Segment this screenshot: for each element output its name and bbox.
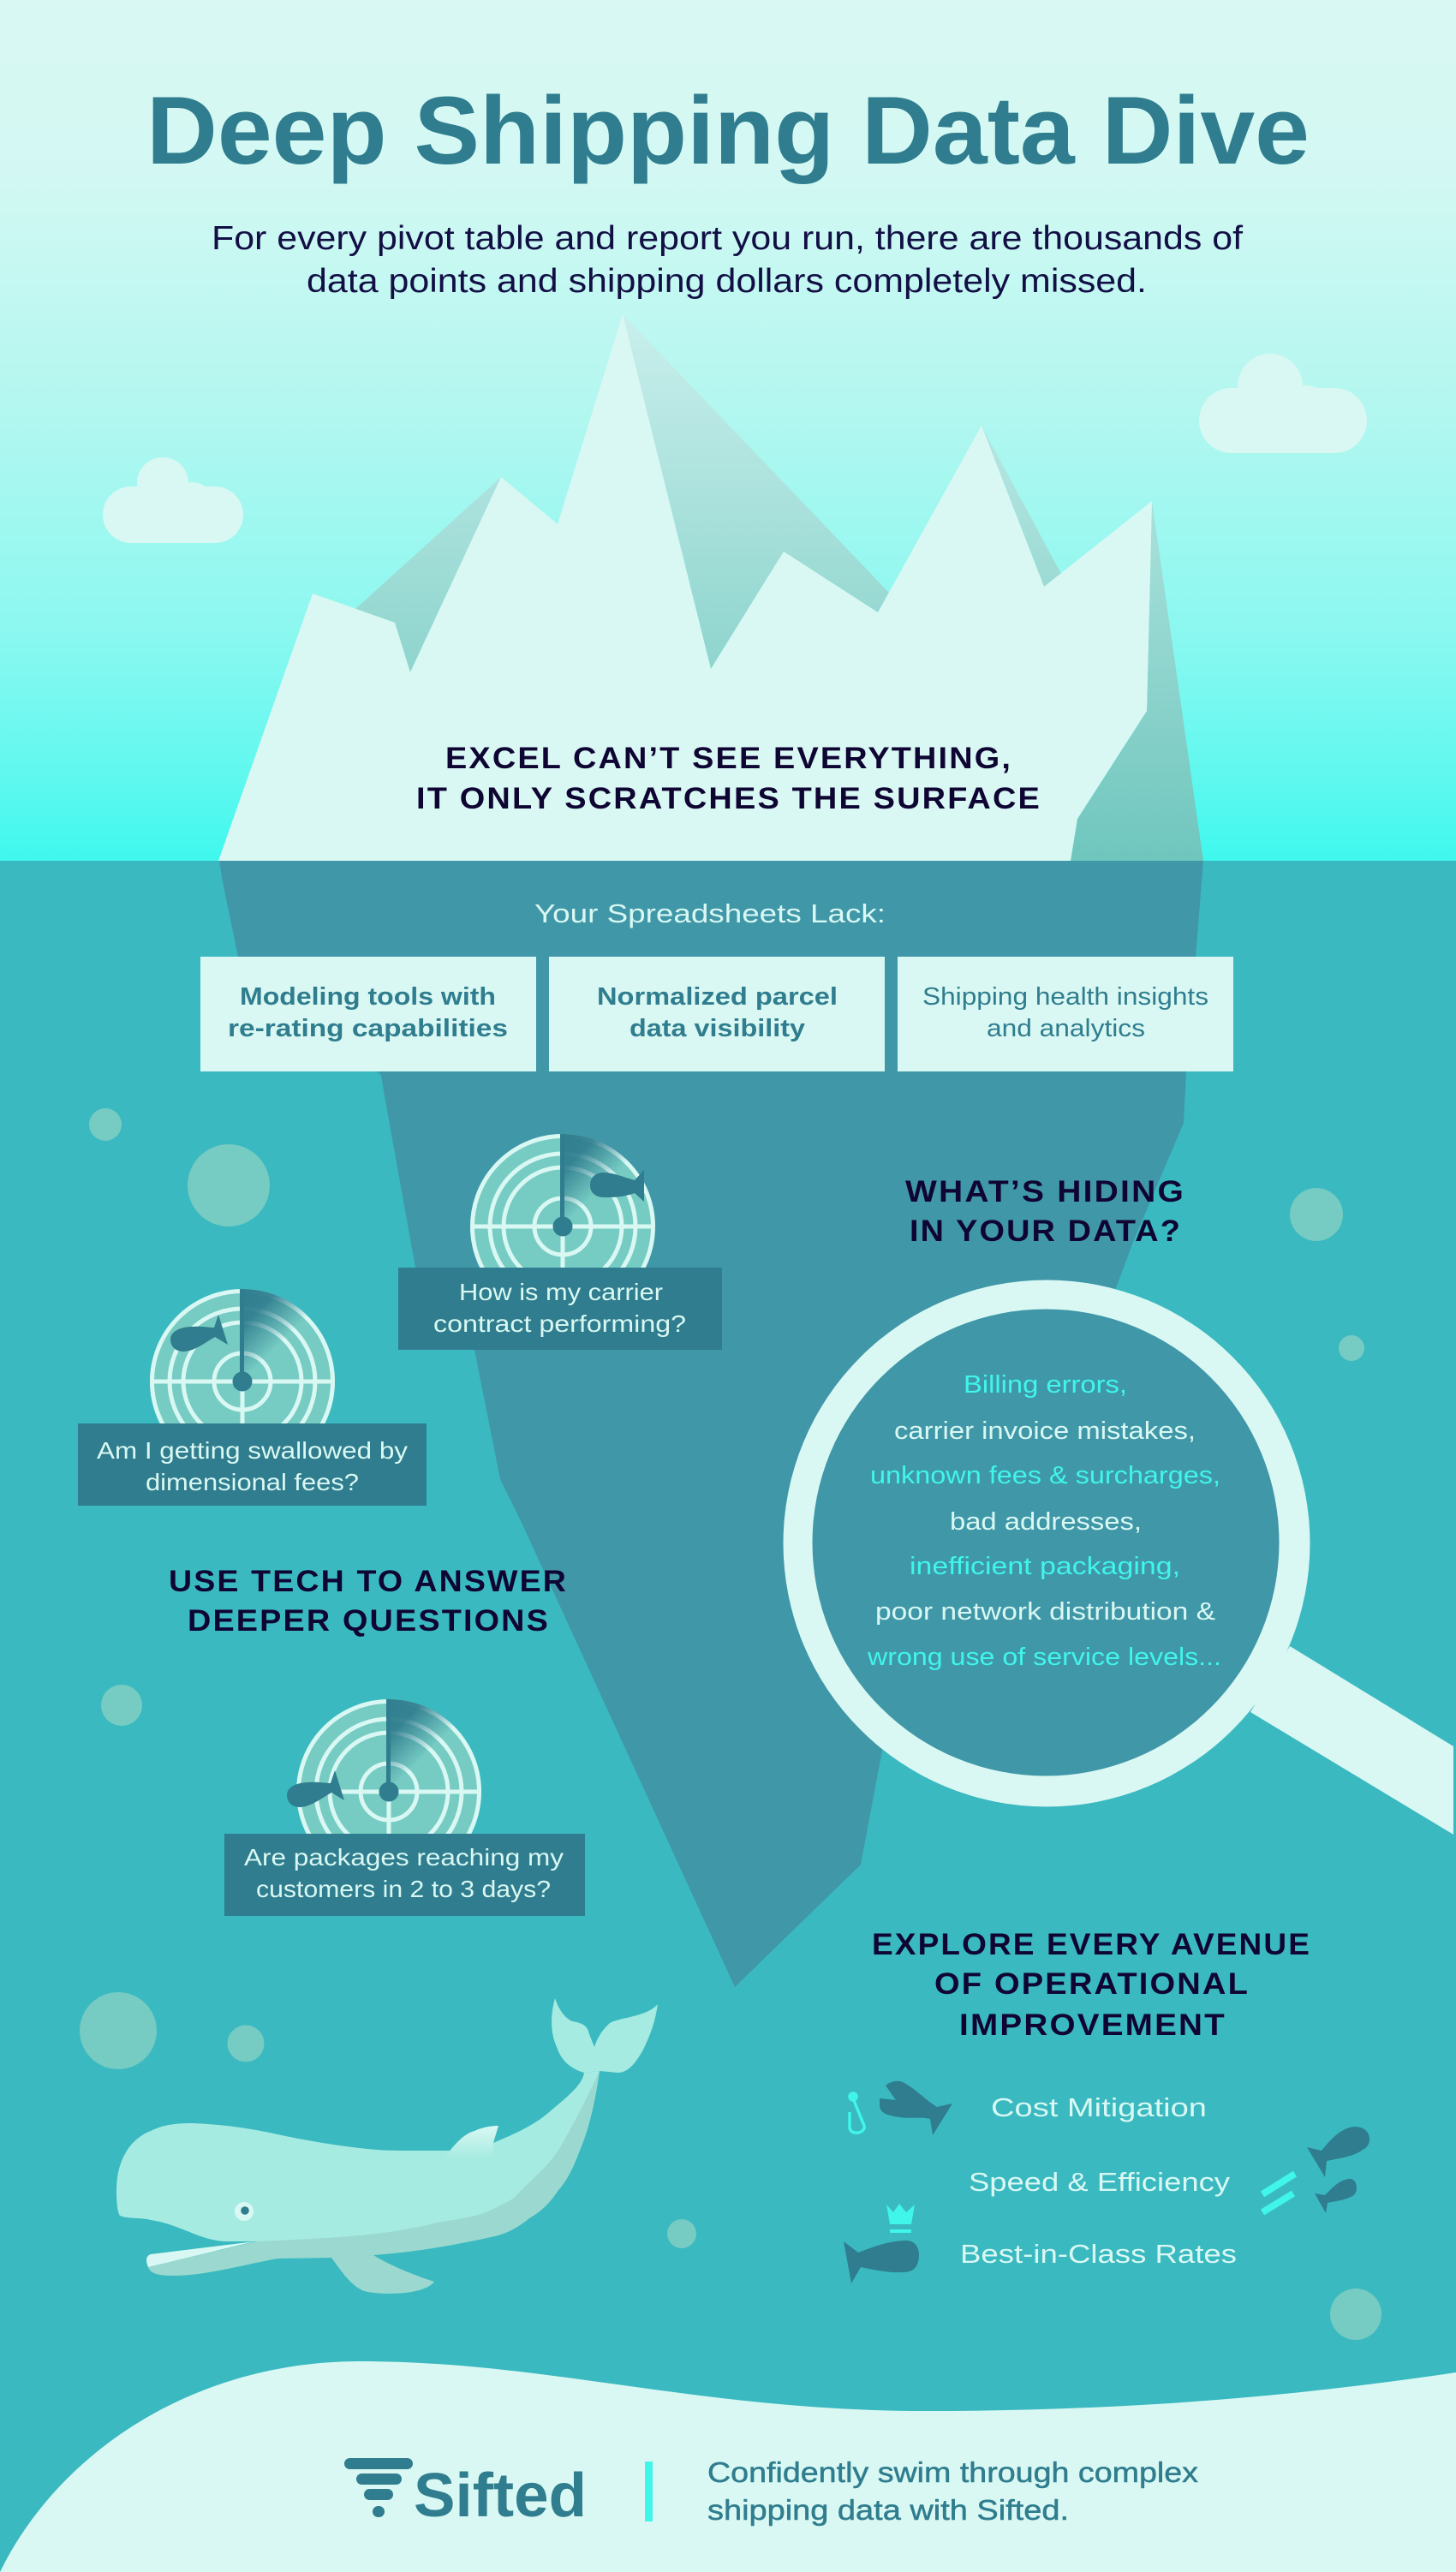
magnifying glass xyxy=(783,1280,1453,1835)
iceberg under water xyxy=(219,861,1203,1987)
heading: use tech xyxy=(169,1565,568,1638)
item: cost mitigation: Cost Mitigation xyxy=(991,2092,1207,2122)
icon: fish xyxy=(170,1315,228,1352)
box: shipping health xyxy=(898,957,1233,1071)
subtitle: data points and shipping dollars completely missed. xyxy=(307,263,1147,300)
magnifier text list: wrong use of service levels... xyxy=(867,1644,1221,1671)
heading: what's hiding: WHAT’S HIDING xyxy=(905,1175,1185,1208)
icon: fish xyxy=(287,1770,344,1807)
icon: fish xyxy=(844,2241,919,2283)
box: normalized data: Normalized parcel xyxy=(597,983,838,1011)
sea background xyxy=(0,861,1456,2572)
box: normalized data xyxy=(549,957,885,1071)
item: best-in-class rates xyxy=(844,2204,1237,2283)
cloud: left xyxy=(103,457,243,543)
magnifier text list: poor network distribution & xyxy=(875,1598,1215,1626)
heading: excel: IT ONLY SCRATCHES THE SURFACE xyxy=(416,782,1041,815)
heading: explore: IMPROVEMENT xyxy=(959,2008,1226,2042)
iceberg front face xyxy=(218,314,1152,861)
magnifier text list: carrier invoice mistakes, xyxy=(894,1417,1196,1445)
heading: explore: OF OPERATIONAL xyxy=(934,1967,1250,2001)
heading: excel: EXCEL CAN’T SEE EVERYTHING, xyxy=(445,742,1012,775)
magnifier text list: unknown fees & surcharges, xyxy=(870,1462,1220,1489)
box: shipping health: Shipping health insights xyxy=(922,983,1208,1011)
logo: sifted: Sifted xyxy=(414,2462,587,2530)
divider xyxy=(645,2462,653,2521)
heading: use tech: USE TECH TO ANSWER xyxy=(169,1565,568,1598)
item: speed and efficiency: Speed & Efficiency xyxy=(969,2167,1231,2197)
radar: delivery time xyxy=(224,1699,585,1916)
box: normalized data: data visibility xyxy=(630,1015,805,1042)
footer tagline xyxy=(707,2456,1199,2526)
question box xyxy=(398,1268,722,1350)
icon: large fish xyxy=(1307,2127,1369,2177)
radar: carrier contract xyxy=(398,1134,722,1350)
subtitle xyxy=(212,220,1243,300)
icon: fish xyxy=(590,1170,644,1202)
magnifier text list: Billing errors, xyxy=(964,1371,1127,1399)
item: cost mitigation xyxy=(850,2081,1207,2135)
cloud: right xyxy=(1199,354,1367,453)
footer wave xyxy=(0,2361,1456,2572)
footer tagline: shipping data with Sifted. xyxy=(707,2494,1069,2526)
magnifier text list: bad addresses, xyxy=(950,1508,1142,1536)
heading: explore: EXPLORE EVERY AVENUE xyxy=(872,1928,1311,1961)
iceberg shadow faces xyxy=(355,314,1203,861)
question box: customers in 2 to 3 days? xyxy=(256,1876,551,1902)
magnifier text list: inefficient packaging, xyxy=(910,1553,1180,1580)
box: modeling tools: Modeling tools with xyxy=(240,983,496,1011)
title: Deep Shipping Data Dive xyxy=(146,77,1310,184)
question box: How is my carrier xyxy=(459,1279,663,1305)
icon: bitten fish xyxy=(880,2081,952,2135)
question box: dimensional fees? xyxy=(146,1469,359,1495)
item: best-in-class rates: Best-in-Class Rates xyxy=(960,2239,1237,2269)
whale xyxy=(116,1998,658,2294)
icon: hook xyxy=(850,2093,864,2133)
box: modeling tools xyxy=(200,957,536,1071)
icon: crown xyxy=(886,2204,915,2233)
icon: speed lines xyxy=(1262,2174,1295,2212)
item: speed and efficiency xyxy=(969,2127,1369,2213)
subtitle: For every pivot table and report you run, there are thousands of xyxy=(212,220,1243,257)
heading: what's hiding: IN YOUR DATA? xyxy=(910,1214,1182,1248)
question box xyxy=(78,1423,427,1506)
heading: use tech: DEEPER QUESTIONS xyxy=(188,1604,550,1638)
radar: dimensional fees xyxy=(78,1289,427,1506)
question box: contract performing? xyxy=(433,1310,686,1337)
logo: sifted xyxy=(344,2458,587,2530)
icon: funnel bars xyxy=(344,2458,413,2517)
heading: excel xyxy=(416,742,1041,815)
heading: what's hiding xyxy=(905,1175,1185,1248)
bubbles xyxy=(80,1108,1381,2340)
box: shipping health: and analytics xyxy=(987,1015,1145,1042)
heading: explore xyxy=(872,1928,1311,2042)
label: spreadsheets lack: Your Spreadsheets Lack: xyxy=(534,898,886,928)
box: modeling tools: re-rating capabilities xyxy=(228,1015,508,1042)
icon: small fish xyxy=(1315,2179,1357,2213)
question box: Am I getting swallowed by xyxy=(97,1437,408,1464)
sky background xyxy=(0,0,1456,861)
footer tagline: Confidently swim through complex xyxy=(707,2456,1199,2488)
question box xyxy=(224,1834,585,1916)
question box: Are packages reaching my xyxy=(244,1844,564,1871)
magnifier text list xyxy=(867,1371,1221,1671)
iceberg above water xyxy=(218,314,1203,861)
